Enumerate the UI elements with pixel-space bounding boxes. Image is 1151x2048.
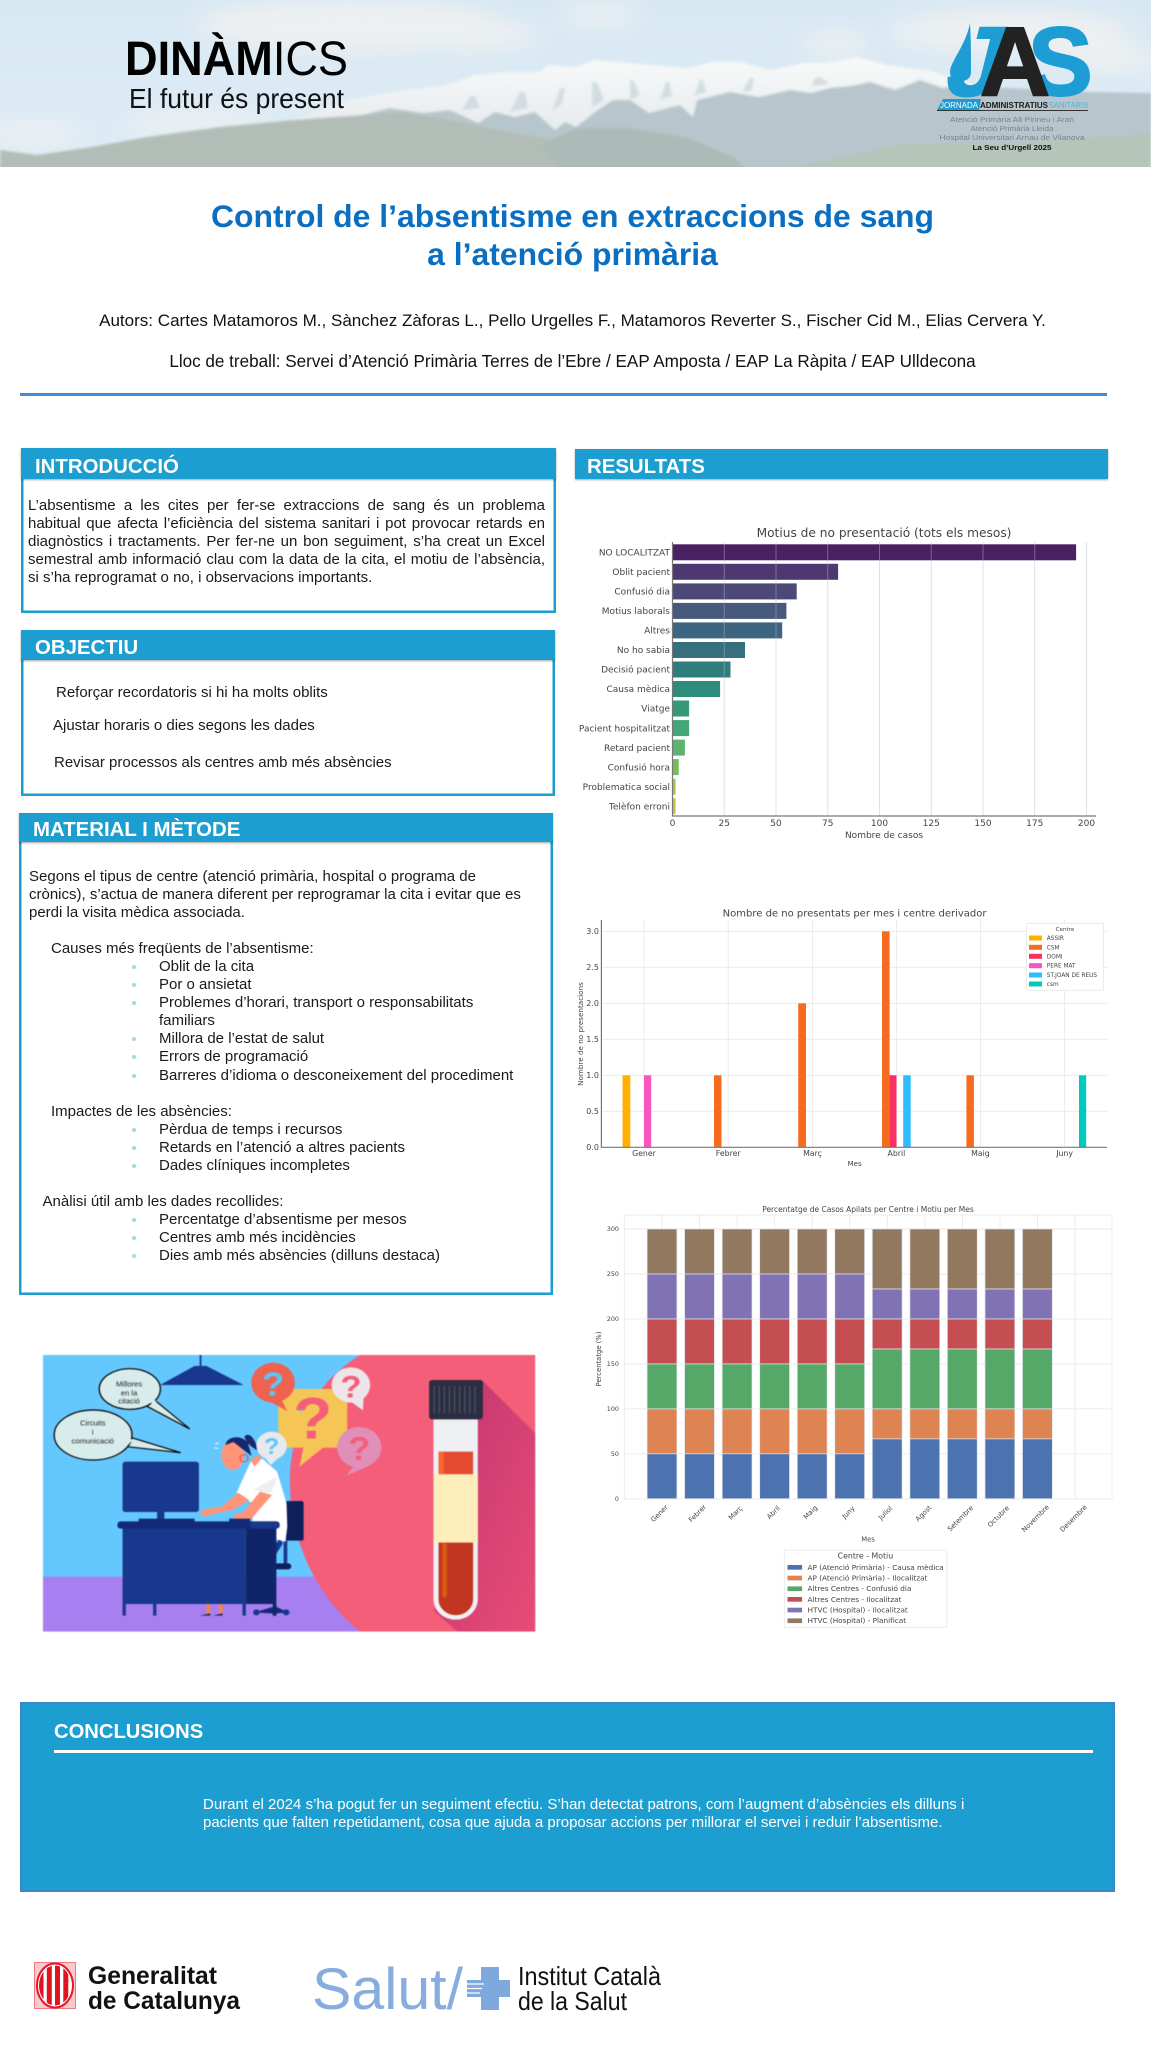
icon: question bubbles: ? [293,1386,332,1451]
chart: percentatge de casos apilats: Desembre [1058,1503,1089,1534]
chart: motius de no presentació: Motius de no presentació (tots els mesos) [757,526,1011,540]
chart: no presentats per mes i centre: Abril [887,1149,905,1158]
chart: motius de no presentació: Altres [644,627,670,637]
logo: JAS: ADMINISTRATIUS [980,101,1049,110]
callout: millores en la citació: en la [121,1389,138,1398]
legend: centre: ASSIR [1047,936,1064,942]
icon: computer and desk [117,1462,280,1616]
icon: blood test tube [429,1380,483,1620]
panel: material i mètode [19,813,553,1295]
chart: motius de no presentació: 200 [1078,819,1095,829]
chart: percentatge de casos apilats: Percentatge (%) [595,1331,603,1386]
chart: percentatge de casos apilats: Percentatge de Casos Apilats per Centre i Motiu per Mes [762,1205,974,1214]
chart: motius de no presentació: Nombre de casos [845,831,923,841]
list: causes: Errors de programació [159,1048,308,1065]
title: a l’atenció primària [427,236,718,272]
list: anàlisi: Dies amb més absències (dilluns destaca) [159,1247,440,1264]
chart: motius de no presentació: Confusió dia [614,587,670,598]
chart: motius de no presentació: 25 [719,819,730,829]
callout: millores en la citació [99,1369,190,1429]
logo: Generalitat de Catalunya: de Catalunya [88,1987,241,2015]
callout: millores en la citació: Millores [116,1380,143,1389]
chart: percentatge de casos apilats: 300 [607,1225,619,1233]
callout: circuits i comunicació [54,1410,181,1460]
chart: motius de no presentació: 150 [974,819,992,829]
callout: millores en la citació: citació [118,1397,140,1406]
heading: objectiu [21,630,555,660]
icon: question bubbles: ? [348,1430,370,1468]
chart: percentatge de casos apilats: Mes [861,1536,875,1544]
logo: Salut / Institut Català de la Salut [312,1957,661,2017]
chart: motius de no presentació: Motius laborals [602,607,670,617]
chart: percentatge de casos apilats: Gener [649,1503,670,1524]
list: anàlisi: Percentatge d’absentisme per mesos [159,1211,407,1228]
heading: resultats [575,449,1108,479]
chart: no presentats per mes i centre: Nombre de no presentacions [576,982,585,1086]
chart: motius de no presentació: Oblit pacient [612,568,670,578]
heading: conclusions: CONCLUSIONS [54,1721,203,1743]
chart: no presentats per mes i centre: 2.5 [586,963,599,972]
legend: centre - motiu: Centre - Motiu [838,1552,893,1560]
text: conclusions [203,1796,964,1831]
icon: woman working at computer: ? [264,1435,279,1460]
chart: motius de no presentació: No ho sabia [617,646,670,656]
logo: JAS: S [1028,7,1093,116]
list: causes: Problemes d’horari, transport o responsabilitats [159,994,473,1011]
chart: motius de no presentació: Viatge [641,705,670,715]
legend: centre - motiu: Altres Centres - Ilocalitzat [808,1595,902,1604]
list: causes: Millora de l’estat de salut [159,1030,324,1047]
chart: no presentats per mes i centre: Nombre de no presentats per mes i centre derivador [723,908,987,920]
chart: percentatge de casos apilats: Febrer [687,1503,708,1524]
chart: percentatge de casos apilats: 200 [607,1315,619,1323]
chart: percentatge de casos apilats: Novembre [1020,1503,1051,1534]
chart: motius de no presentació: 100 [871,819,888,829]
chart: no presentats per mes i centre: 0.5 [586,1107,599,1116]
list: causes [51,940,514,1084]
workplace: Lloc de treball: Servei d’Atenció Primària Terres de l’Ebre / EAP Amposta / EAP La Ràpita / EAP Ulldecona [169,352,976,371]
heading: material i mètode: MATERIAL I MÈTODE [33,819,240,841]
chart: motius de no presentació: NO LOCALITZAT [599,548,670,558]
legend: centre: DOMI [1047,954,1063,960]
chart: motius de no presentació: Confusió hora [608,762,670,773]
list: anàlisi: Centres amb més incidències [159,1229,356,1246]
chart: no presentats per mes i centre [576,908,1107,1168]
panel: conclusions [20,1702,1115,1892]
logo: Salut / Institut Català de la Salut: de la Salut [518,1986,628,2016]
text: introducció del mètode: perdi la visita mèdica associada. [29,904,245,921]
illustration: patient at desk, questions and blood tube [42,1354,536,1632]
logo: Generalitat de Catalunya [34,1962,241,2015]
chart: percentatge de casos apilats: Abril [765,1504,782,1521]
chart: no presentats per mes i centre: 1.0 [586,1071,599,1080]
authors: Autors: Cartes Matamoros M., Sànchez Zàforas L., Pello Urgelles F., Matamoros Reverter S., Fischer Cid M., Elias Cervera Y. [99,311,1046,330]
text: introducció del mètode [29,868,521,921]
logo: JAS: La Seu d’Urgell 2025 [972,143,1052,152]
text: introducció del mètode: Segons el tipus de centre (atenció primària, hospital o programa de [29,868,476,885]
chart: motius de no presentació: Problematica social [583,783,670,793]
legend: centre: PERE MAT [1047,964,1076,970]
legend: centre - motiu [784,1550,947,1627]
chart: motius de no presentació: Pacient hospitalitzat [579,724,670,734]
chart: percentatge de casos apilats: 50 [611,1450,619,1458]
chart: no presentats per mes i centre: Febrer [716,1149,741,1158]
chart: motius de no presentació: Telèfon erroni [608,801,670,812]
legend: centre - motiu: HTVC (Hospital) - Ilocalitzat [808,1606,908,1614]
legend: centre - motiu: HTVC (Hospital) - Planificat [808,1616,906,1625]
chart: motius de no presentació: Retard pacient [604,744,670,754]
logo: Dinàmics [125,32,348,114]
icon: question bubbles: ? [262,1366,284,1403]
chart: no presentats per mes i centre: Juny [1055,1149,1073,1158]
text: objectius: Ajustar horaris o dies segons les dades [53,717,315,734]
legend: centre - motiu: AP (Atenció Primària) - Causa mèdica [808,1563,944,1572]
heading: objectiu: OBJECTIU [35,637,138,659]
chart: percentatge de casos apilats: Març [727,1504,744,1522]
logo: Dinàmics: DINÀMICS [125,32,348,86]
logo: JAS: A [980,7,1050,116]
list: causes: Causes més freqüents de l’absentisme: [51,940,314,957]
list: impactes: Retards en l’atenció a altres pacients [159,1139,405,1156]
chart: motius de no presentació [579,526,1096,841]
text: objectius: Revisar processos als centres amb més absències [54,754,392,771]
heading: material i mètode [19,813,553,842]
heading: resultats: RESULTATS [587,456,705,478]
text: objectius: Reforçar recordatoris si hi ha molts oblits [56,684,328,701]
text: introducció del mètode: crònics), s’actua de manera diferent per reprogramar la cita i evitar que es [29,886,521,903]
text: conclusions: Durant el 2024 s’ha pogut fer un seguiment efectiu. S’han detectat patrons, com l’augment d’absències els dilluns i [203,1796,964,1813]
panel: objectiu [21,630,555,796]
legend: centre: CSM [1047,945,1060,951]
callout: circuits i comunicació: i [92,1428,94,1437]
chart: no presentats per mes i centre: Gener [632,1149,657,1158]
header banner with mountains and logos [0,0,1151,167]
chart: motius de no presentació: Decisió pacient [601,665,670,676]
list: impactes: Dades clíniques incompletes [159,1157,350,1174]
chart: motius de no presentació: Causa mèdica [606,684,670,695]
callout: circuits i comunicació: comunicació [72,1437,114,1446]
logo: JAS: Atenció Primària Alt Pirineu i Aran [950,115,1074,124]
logo: JAS: J [937,5,1020,118]
logo: JAS: SANITARIS [1049,101,1088,110]
chart: percentatge de casos apilats: 0 [615,1495,619,1503]
heading: introducció: INTRODUCCIÓ [35,456,179,478]
legend: centre [1026,923,1104,990]
chart: no presentats per mes i centre: 3.0 [586,927,599,936]
list: impactes: Pèrdua de temps i recursos [159,1121,342,1138]
chart: motius de no presentació: 125 [923,819,940,829]
text: conclusions: pacients que falten repetidament, cosa que ajuda a proposar accions per millorar el servei i reduir l’absentisme. [203,1814,943,1831]
chart: no presentats per mes i centre: Març [803,1149,822,1158]
logo: JAS: Atenció Primària Lleida [970,124,1054,133]
panel: introducció [21,448,556,613]
logo: JAS: Hospital Universitari Arnau de Vilanova [940,133,1085,142]
icon: woman working at computer [199,1432,304,1616]
chart: motius de no presentació: 175 [1026,819,1043,829]
text: introducció [28,497,545,586]
text: introducció: semestral amb informació clau com la data de la cita, el motiu de l’absència, [28,551,545,568]
chart: percentatge de casos apilats: Juliol [876,1504,894,1522]
icon: question bubbles [251,1363,381,1476]
legend: centre - motiu: AP (Atenció Primària) - Ilocalitzat [808,1574,928,1582]
chart: motius de no presentació: 75 [822,819,833,829]
chart: percentatge de casos apilats [595,1205,1112,1628]
list: causes: Barreres d’idioma o desconeixement del procediment [159,1067,513,1084]
icon: question bubbles: ? [340,1370,361,1405]
chart: percentatge de casos apilats: 150 [607,1360,619,1368]
text: introducció: habitual que afecta l’eficiència del sistema sanitari i pot provocar retards en [28,515,545,532]
text: introducció: L’absentisme a les cites per fer-se extraccions de sang és un problema [28,497,545,514]
logo: Salut / Institut Català de la Salut: Institut Català [518,1961,661,1991]
title: Control de l’absentisme en extraccions de sang [211,198,934,234]
text: introducció: diagnòstics i tractaments. Per fer-ne un bon seguiment, s’ha creat un Excel [28,533,545,550]
chart: no presentats per mes i centre: 2.0 [586,999,599,1008]
chart: percentatge de casos apilats: 250 [607,1270,619,1278]
legend: centre: Centre [1056,927,1075,933]
text: introducció: si s’ha reprogramat o no, i observacions importants. [28,569,372,586]
list: anàlisi: Anàlisi útil amb les dades recollides: [42,1193,283,1210]
chart: motius de no presentació: 50 [770,819,782,829]
chart: percentatge de casos apilats: Agost [914,1504,933,1523]
chart: percentatge de casos apilats: Maig [802,1504,819,1521]
logo: Dinàmics: El futur és present [129,83,344,114]
list: anàlisi [42,1193,440,1264]
logo: Generalitat de Catalunya: Generalitat [88,1962,218,1990]
text: objectius [53,684,392,771]
chart: percentatge de casos apilats: 100 [607,1405,619,1413]
chart: no presentats per mes i centre: 1.5 [586,1035,599,1044]
chart: percentatge de casos apilats: Setembre [946,1504,975,1533]
list: impactes: Impactes de les absències: [51,1103,232,1120]
legend: centre: csm [1047,982,1059,988]
icon: lamp [160,1355,244,1385]
chart: percentatge de casos apilats: Juny [840,1505,857,1521]
list: causes: Oblit de la cita [159,958,254,975]
title [211,198,934,272]
chart: percentatge de casos apilats: Octubre [986,1504,1011,1529]
legend: centre - motiu: Altres Centres - Confusió dia [808,1584,911,1593]
heading: introducció [21,448,556,479]
legend: centre: ST.JOAN DE REUS [1047,973,1097,979]
list: causes: familiars [159,1012,215,1029]
list: impactes [51,1103,405,1174]
chart: motius de no presentació: 0 [670,819,676,829]
logo: JAS [937,5,1093,152]
chart: no presentats per mes i centre: 0.0 [586,1143,599,1152]
chart: no presentats per mes i centre: Mes [848,1160,862,1168]
logo: JAS: JORNADA [940,101,979,110]
callout: circuits i comunicació: Circuits [80,1419,106,1428]
list: causes: Por o ansietat [159,976,252,993]
chart: no presentats per mes i centre: Maig [971,1149,990,1158]
